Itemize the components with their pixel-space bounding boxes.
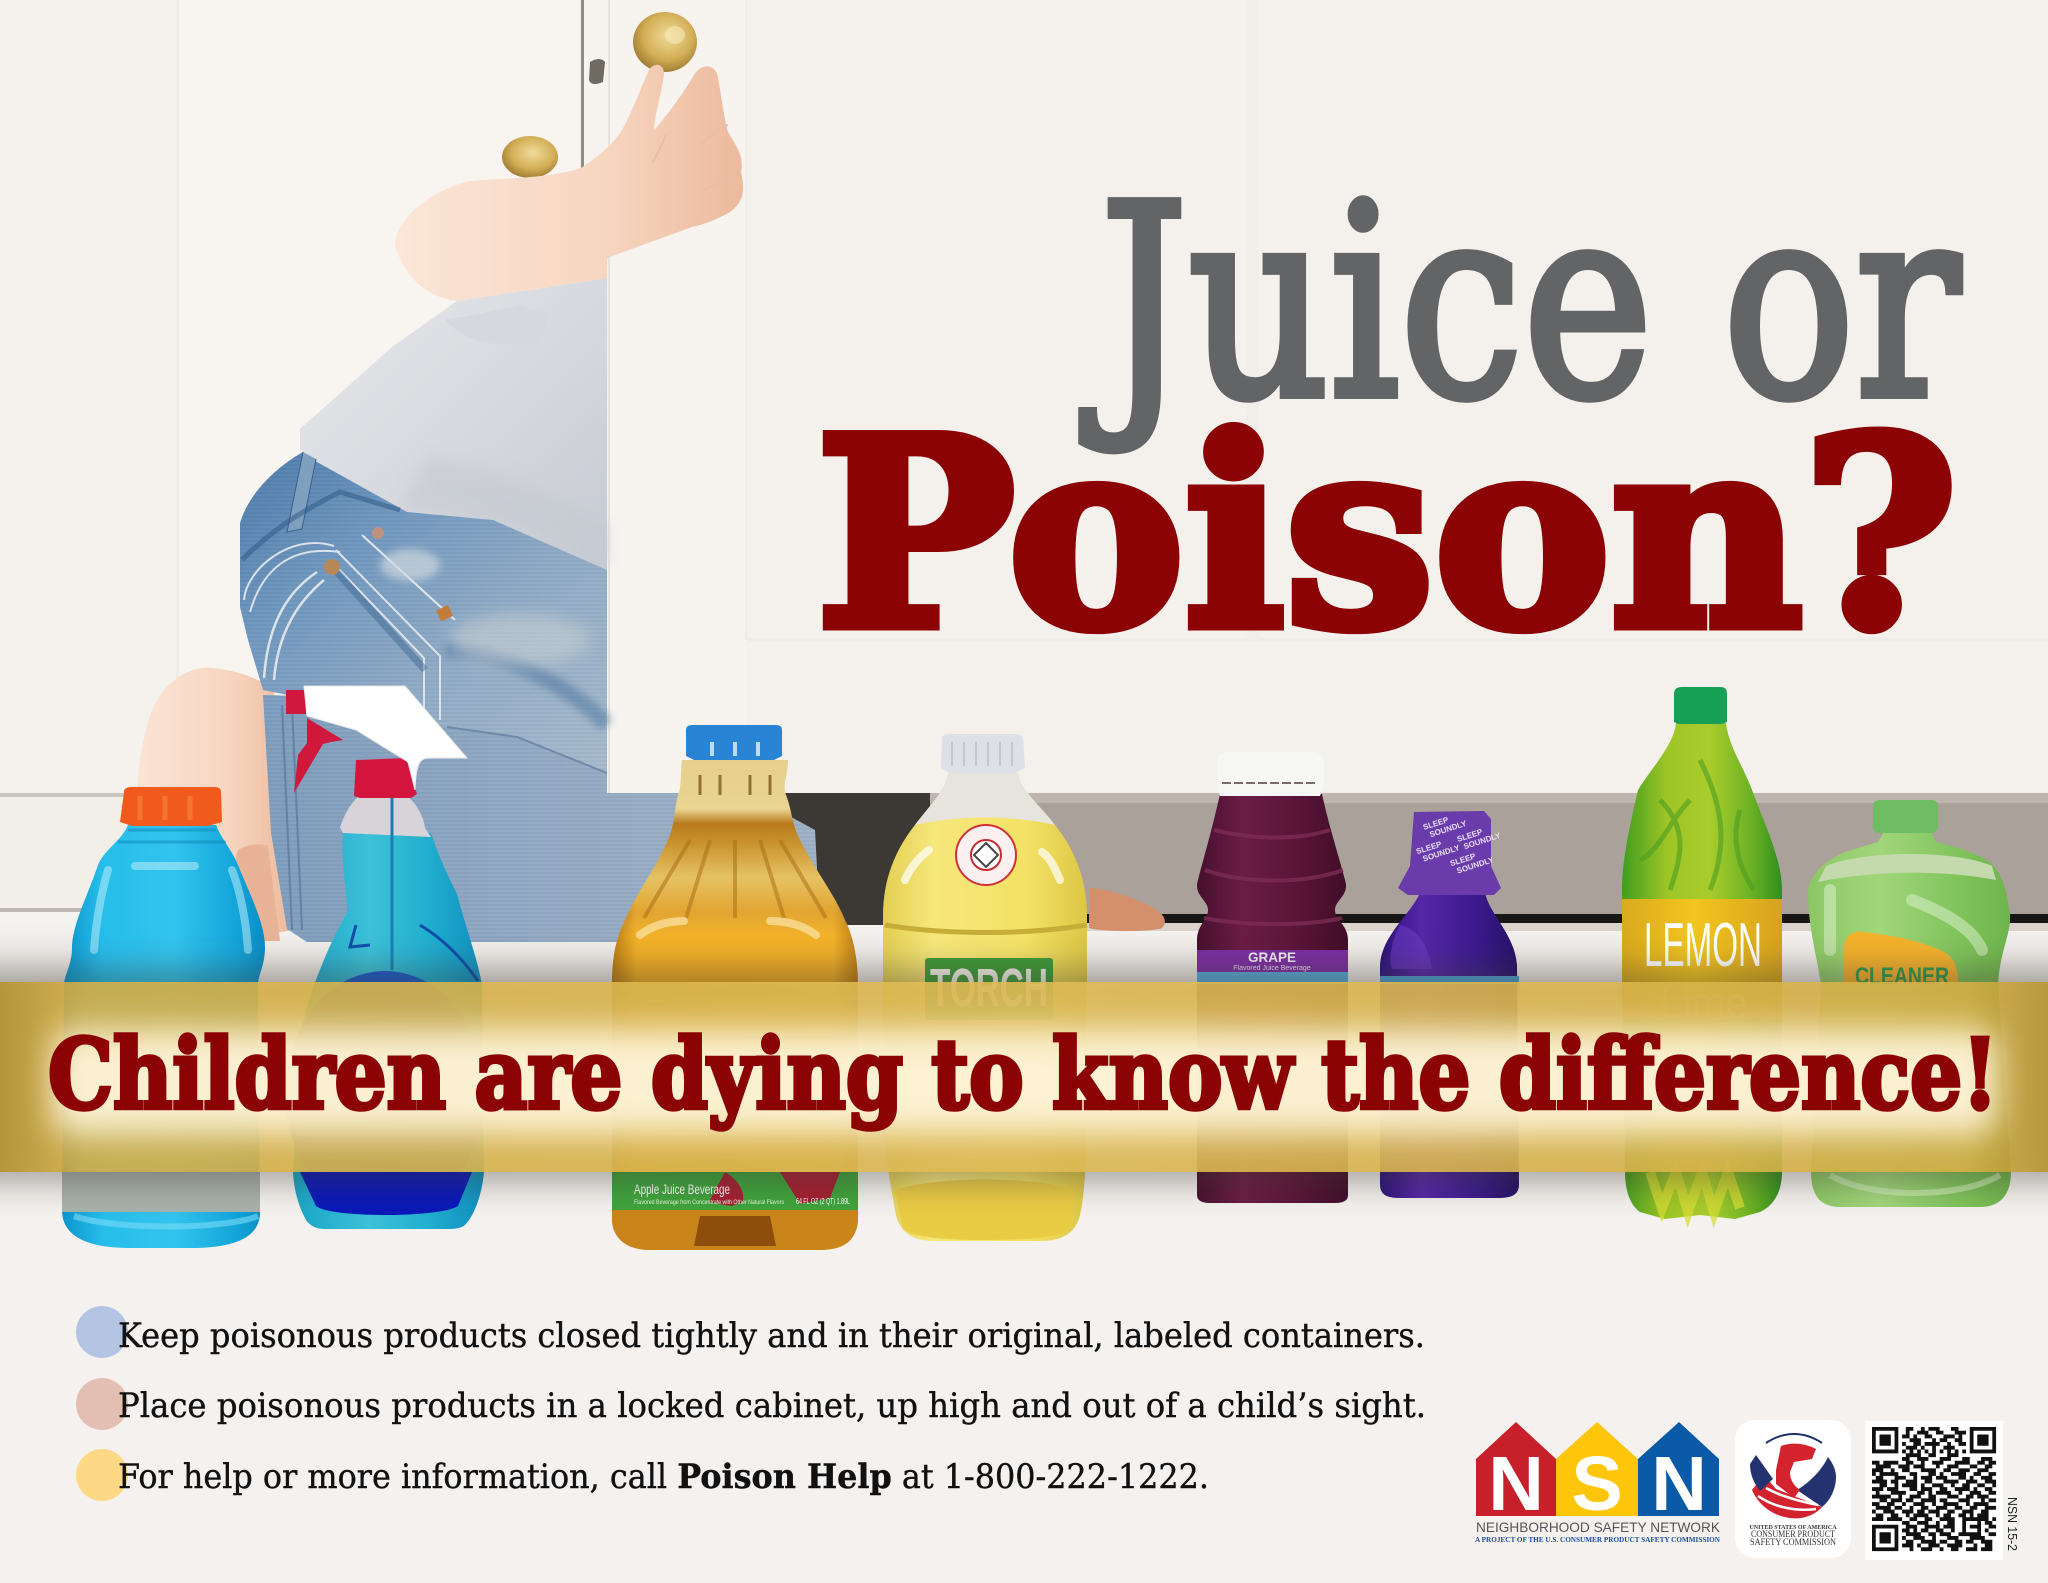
white spray head (304, 686, 467, 790)
banner shadow (0, 968, 2048, 1184)
logo: Consumer Product Safety Commission: CONSUMER PRODUCT (1751, 1529, 1835, 1539)
tip 3 bullet (76, 1449, 128, 1501)
logo: Consumer Product Safety Commission: UNITED STATES OF AMERICA (1749, 1525, 1837, 1531)
logo: Neighborhood Safety Network (1475, 1422, 1721, 1544)
blue cap (686, 725, 782, 760)
denim stitching and rivets (242, 452, 607, 725)
arm and hand (395, 65, 743, 301)
gold banner (0, 982, 2048, 1172)
open cabinet door (608, 0, 2048, 793)
bottle: green cleaner (1808, 800, 2011, 1207)
orange cap (120, 787, 222, 826)
tip 2 bullet (76, 1378, 128, 1430)
bottle: grape juice: GRAPE (1248, 949, 1296, 965)
logo: Neighborhood Safety Network: A PROJECT OF THE U.S. CONSUMER PRODUCT SAFETY COMMISSION (1475, 1535, 1721, 1544)
tip 2 text: Place poisonous products in a locked cabinet, up high and out of a child’s sight. (118, 1386, 1426, 1426)
bottle: apple juice: Apple Juice Beverage (634, 1181, 730, 1197)
shirt (300, 278, 607, 575)
knee and foot (126, 668, 294, 936)
door knob: gold (633, 12, 697, 72)
bottle: cooking oil Torch (883, 734, 1087, 1241)
orange label: CLEANER (1855, 963, 1949, 990)
bottle: apple juice: Flavored Beverage from Concentrate with Other Natural Flavors (634, 1200, 784, 1206)
safety tips list (76, 1306, 1426, 1501)
green label (612, 1172, 858, 1210)
purple cap seal: SLEEP (1422, 815, 1450, 832)
white cap (941, 734, 1025, 773)
bottle: grape juice: Flavored Juice Beverage (1233, 965, 1311, 972)
purple cap seal: SOUNDLY (1422, 843, 1462, 864)
other hand on floor (1089, 888, 1165, 931)
bottle: apple juice: 64 FL OZ (2 QT) 1.89L (796, 1197, 850, 1206)
red collar and trigger (354, 758, 417, 798)
bottle: cooking oil Torch: TORCH (930, 958, 1048, 1018)
jeans: hip and thigh (240, 452, 607, 773)
under-cabinet toe kick (785, 793, 2048, 931)
purple cap seal: SOUNDLY (1428, 819, 1468, 839)
jeans: lower leg (263, 695, 820, 942)
yellow label (1622, 899, 1782, 1019)
bottle: blue glass cleaner spray (285, 686, 485, 1229)
tip 1 text: Keep poisonous products closed tightly and in their original, labeled containers. (118, 1316, 1425, 1356)
door knob: left cabinet (502, 59, 605, 178)
orange label (1844, 932, 1958, 990)
purple cap seal: SOUNDLY (1462, 831, 1502, 851)
bottle: grape juice (1197, 752, 1348, 1203)
purple cap seal: SOUNDLY (1456, 855, 1496, 876)
bottle: lemon lime soda: Lime (1660, 979, 1748, 1028)
child: reaching for the cabinet (126, 65, 1165, 942)
document code: NSN 15-2 (2005, 1497, 2020, 1551)
logo: Neighborhood Safety Network: N (1488, 1441, 1544, 1527)
purple cap seal (1398, 810, 1509, 895)
purple cap seal: SLEEP (1415, 839, 1443, 856)
purple cap seal: SLEEP (1456, 827, 1484, 844)
green label Torch (925, 958, 1053, 1020)
bottle: apple juice (612, 725, 858, 1250)
logo: Neighborhood Safety Network: N (1651, 1441, 1707, 1527)
bottle: lemon lime soda (1622, 687, 1782, 1219)
QR code (1865, 1421, 2003, 1560)
green cap (1674, 687, 1727, 724)
bottle: lemon lime soda: LEMON (1644, 911, 1762, 980)
bottle: purple sleep aid (1380, 810, 1519, 1198)
logo: Consumer Product Safety Commission (1735, 1420, 1851, 1558)
logo: Neighborhood Safety Network: S (1571, 1441, 1623, 1527)
green cap (1873, 800, 1938, 833)
bottle: blue sports drink (62, 787, 265, 1248)
logo: Consumer Product Safety Commission: SAFETY COMMISSION (1750, 1537, 1836, 1547)
tip 1 bullet (76, 1306, 128, 1358)
title: Poison?: Poison? (816, 382, 1958, 687)
purple cap seal: SLEEP (1449, 851, 1477, 868)
tip 3 text: For help or more information, call Poison Help at 1-800-222-1222. (118, 1457, 1209, 1497)
danger sticker (956, 825, 1016, 885)
logo: Neighborhood Safety Network: NEIGHBORHOOD SAFETY NETWORK (1476, 1519, 1721, 1535)
white cap (1217, 752, 1324, 796)
